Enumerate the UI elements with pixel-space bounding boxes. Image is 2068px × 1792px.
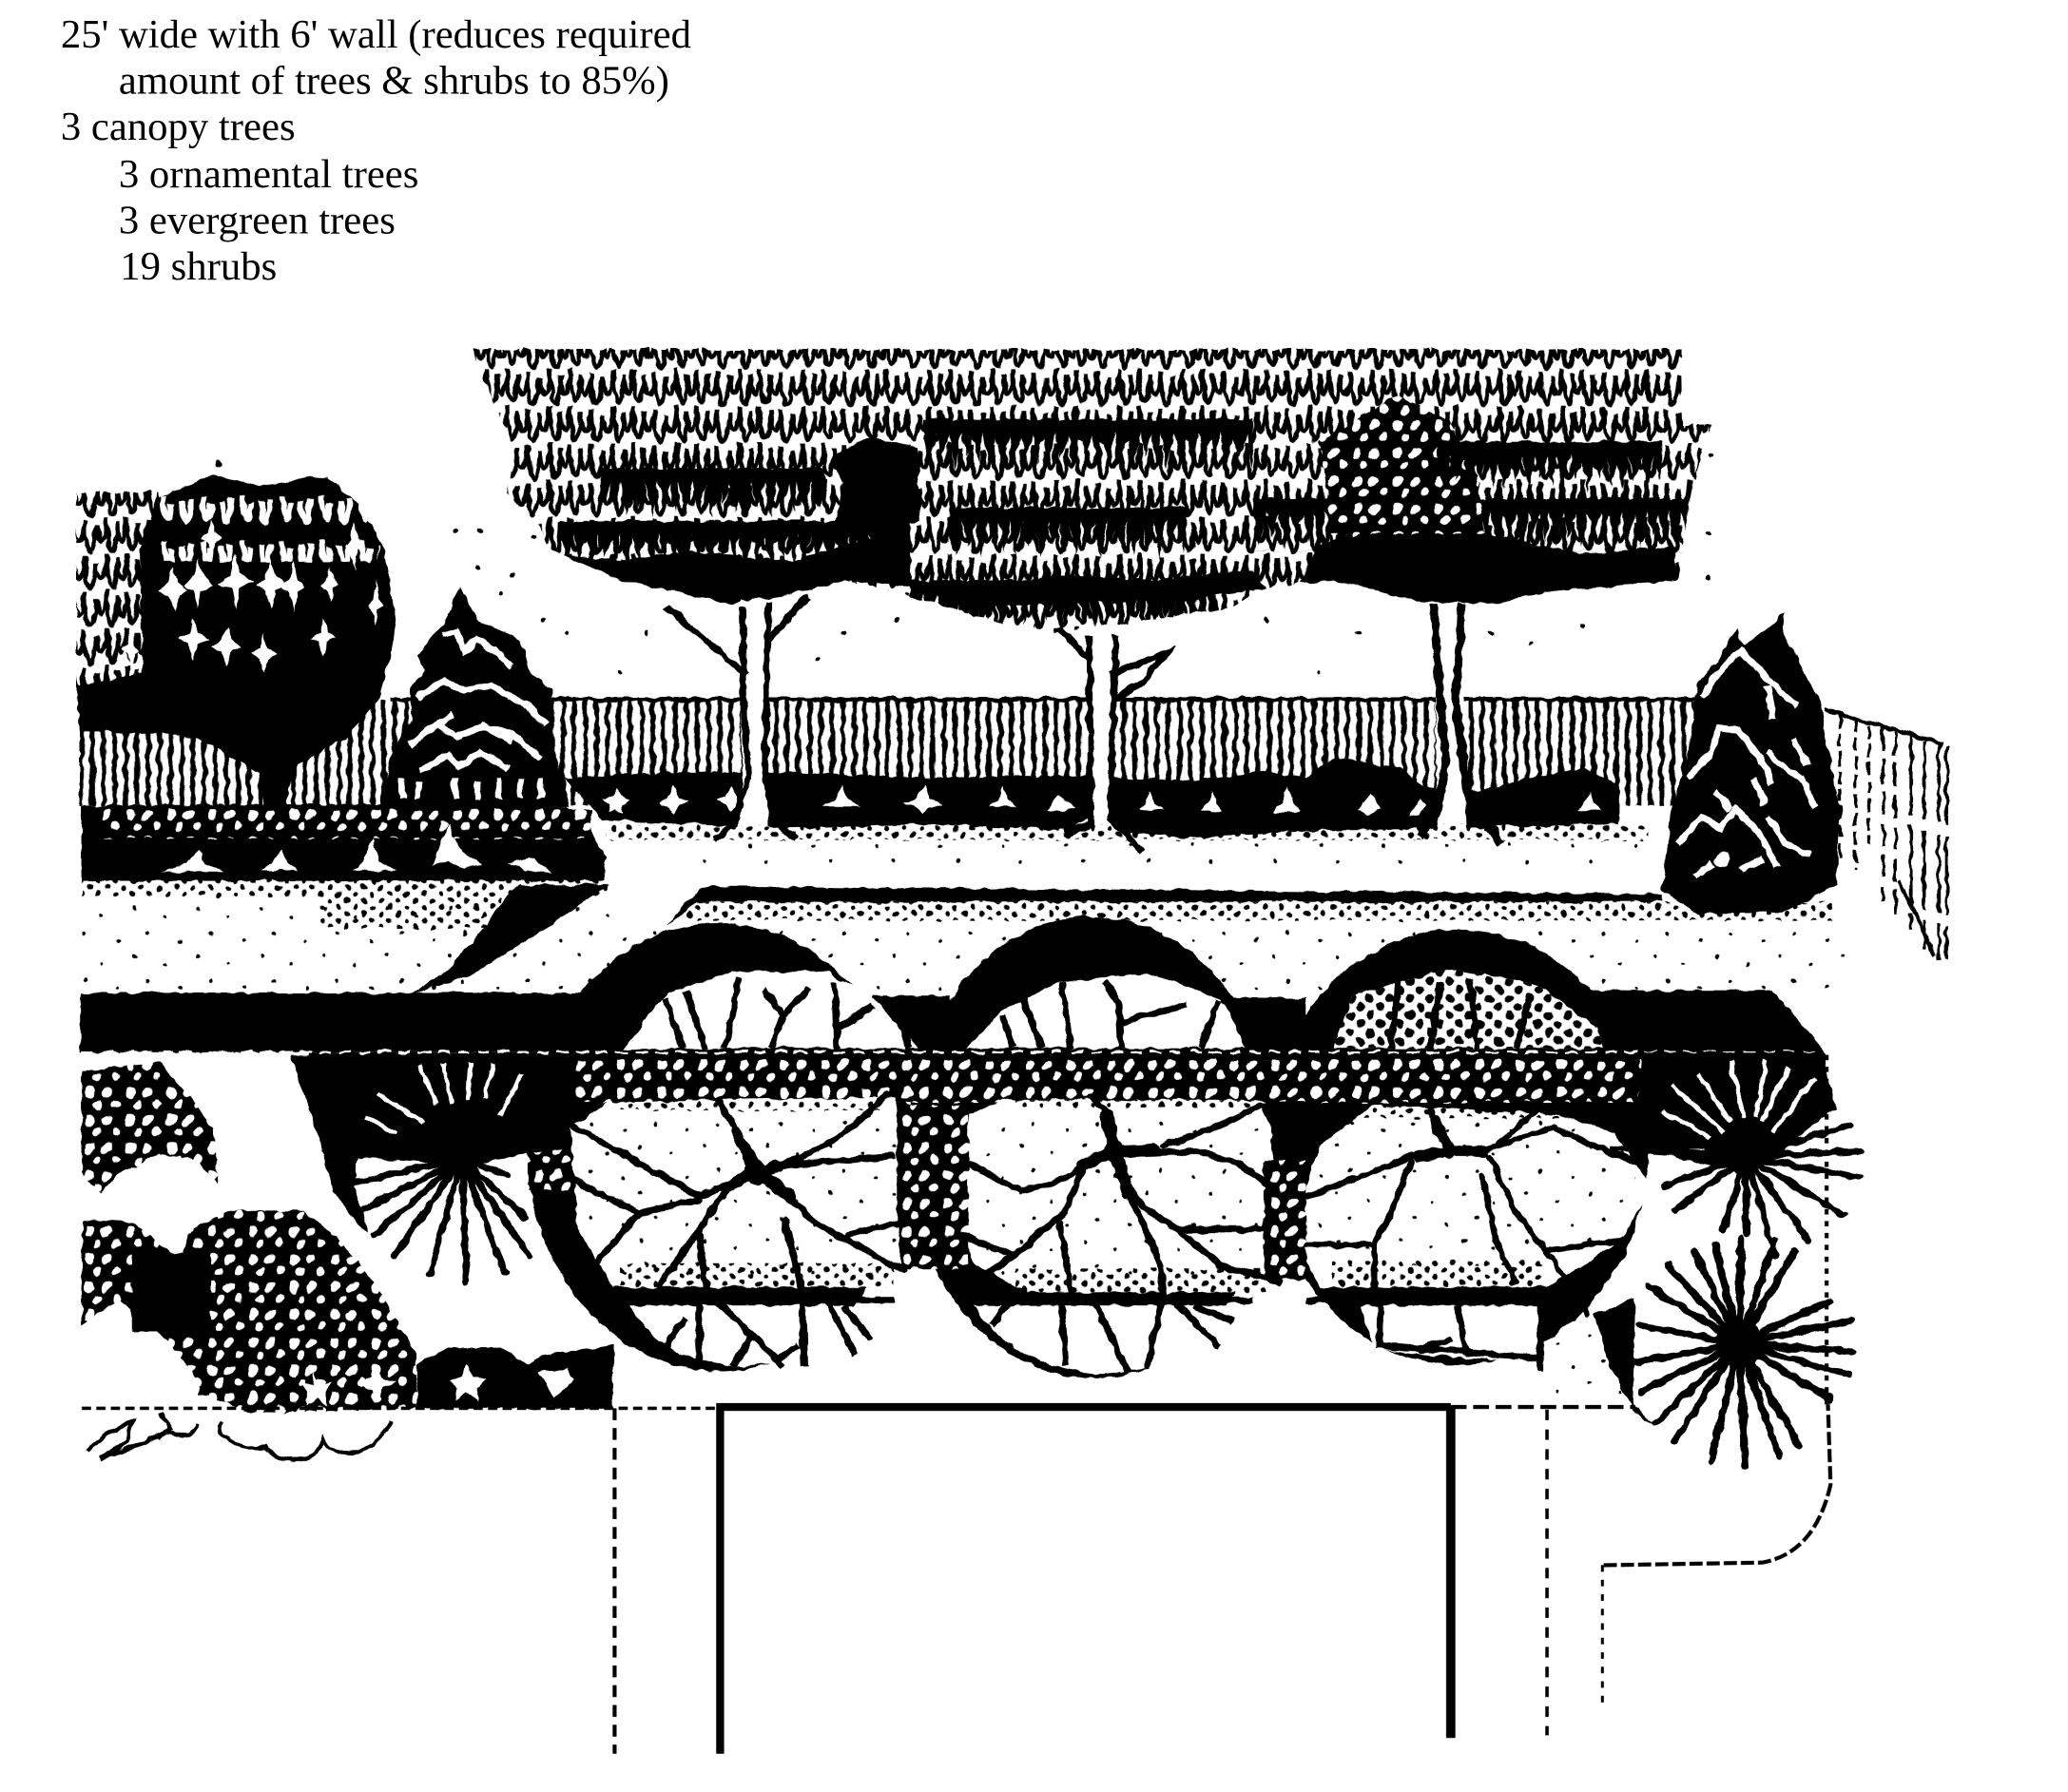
stippling in crown cells: [580, 1100, 1635, 1397]
tree one branches: [573, 1094, 905, 1299]
ornamental tree on the left: [77, 459, 396, 804]
lower crown band line: [620, 1298, 1554, 1302]
mottled foliage between trees: [528, 1105, 1305, 1279]
building footprint outline: [720, 1407, 1451, 1754]
right star-burst evergreen, lower: [1594, 1240, 1853, 1466]
right star-burst evergreen, upper: [1613, 1052, 1860, 1255]
white canopy cells under the dome, above the wall: [623, 969, 1602, 1049]
dome branches: [665, 977, 1530, 1049]
heading: buffer requirements: 3 canopy trees: [61, 105, 296, 149]
heading: buffer requirements: 25' wide with 6' wall (reduces required: [61, 12, 691, 57]
canopy tree trunks: [667, 596, 1501, 852]
lawn stipple and left diagonal edge: [82, 824, 1846, 999]
left star-burst evergreen in plan: [290, 1055, 571, 1281]
side fence in perspective: [1826, 709, 1946, 960]
small evergreen tree: [380, 587, 570, 807]
loose foliage dots: [454, 453, 1714, 675]
heading: buffer requirements: 19 shrubs: [120, 244, 277, 289]
lower crown branches: [667, 1295, 1543, 1372]
heading: buffer requirements: 3 ornamental trees: [119, 152, 418, 197]
tree three branches: [1307, 1105, 1645, 1314]
heading: buffer requirements: 3 evergreen trees: [119, 199, 396, 243]
fence along the rear of the buffer: [79, 698, 1696, 805]
right evergreen tree: [1662, 612, 1841, 914]
left foreground hedge: [82, 804, 607, 881]
property line, dotted: [82, 1055, 1830, 1754]
tree crowns: [528, 916, 1649, 1378]
central white crown cells: [571, 1097, 1652, 1292]
left shrub masses: [82, 1063, 613, 1414]
lower white lobes of the crowns: [630, 1305, 1543, 1374]
heading: buffer requirements: amount of trees & shrubs to 85%): [119, 58, 669, 103]
canopy tree foliage: [454, 345, 1721, 675]
three canopy trees in plan view: [82, 916, 1824, 1397]
wall in section, solid black band: [81, 991, 1823, 1055]
rear hedge with shrub highlights: [565, 759, 1619, 838]
tree two branches: [957, 1097, 1281, 1292]
illustration: landscape buffer perspective and plan: [77, 345, 1946, 1466]
heading: buffer requirements: [61, 12, 691, 289]
hedge strip along the wall: [307, 1052, 1824, 1060]
ground cover outlines below the property line: [87, 1414, 391, 1460]
